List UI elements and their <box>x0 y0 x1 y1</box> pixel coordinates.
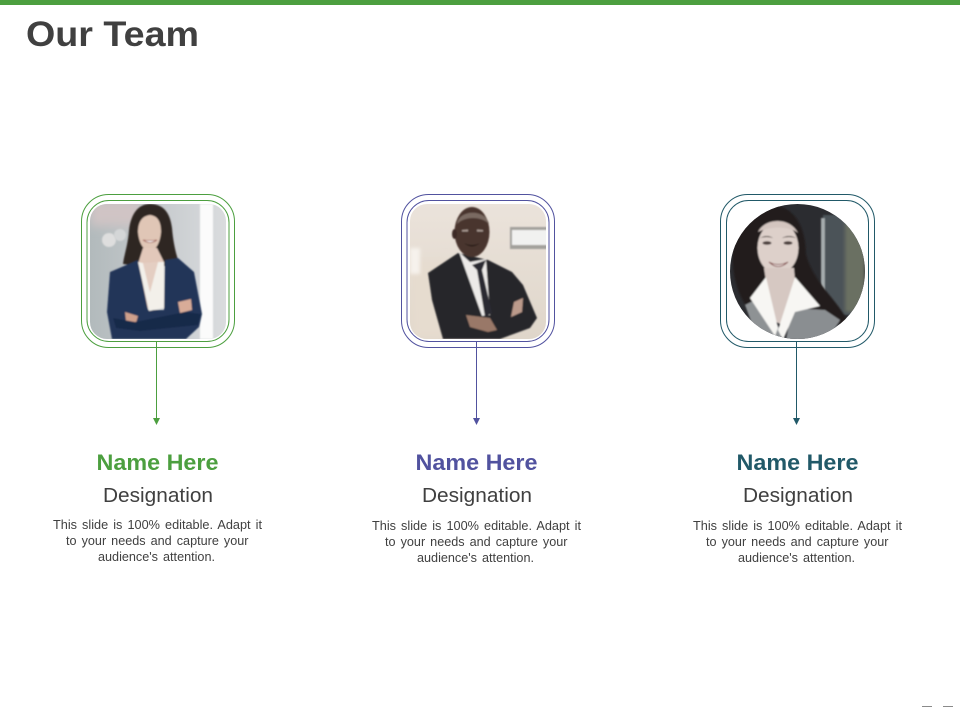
team member card: green <box>53 194 263 564</box>
description: purple card: audience's attention. <box>417 551 534 565</box>
frame: green double rounded border <box>82 194 234 348</box>
portrait: woman in navy blazer <box>90 200 226 339</box>
portrait: woman with dark hair in circle <box>730 204 866 345</box>
description: teal card: This slide is 100% editable. Adapt it <box>693 519 903 533</box>
description: green card: to your needs and capture your <box>66 534 248 548</box>
description: teal card <box>693 519 903 565</box>
description: green card <box>53 518 263 564</box>
description: purple card: to your needs and capture your <box>385 535 568 549</box>
footer marks <box>922 706 953 707</box>
arrow: green connector <box>153 342 160 425</box>
arrow: purple connector <box>473 342 480 425</box>
designation: green card: Designation <box>103 485 213 507</box>
frame: teal double rounded border <box>720 194 874 348</box>
team member card: purple <box>372 194 582 565</box>
description: teal card: audience's attention. <box>738 551 855 565</box>
description: purple card: This slide is 100% editable. Adapt it <box>372 519 582 533</box>
name: green: Name Here <box>96 450 218 475</box>
name: purple: Name Here <box>416 450 538 475</box>
frame: purple double rounded border <box>402 194 554 348</box>
description: teal card: to your needs and capture your <box>706 535 888 549</box>
designation: teal card: Designation <box>743 485 853 507</box>
top accent bar <box>0 0 960 5</box>
team member card: teal <box>693 194 903 565</box>
description: green card: audience's attention. <box>98 550 215 564</box>
description: purple card <box>372 519 582 565</box>
description: green card: This slide is 100% editable. Adapt it <box>53 518 263 532</box>
title: Our Team <box>26 15 199 54</box>
arrow: teal connector <box>793 342 800 425</box>
designation: purple card: Designation <box>422 485 532 507</box>
name: teal: Name Here <box>736 450 858 475</box>
portrait: man in black suit <box>410 204 548 340</box>
